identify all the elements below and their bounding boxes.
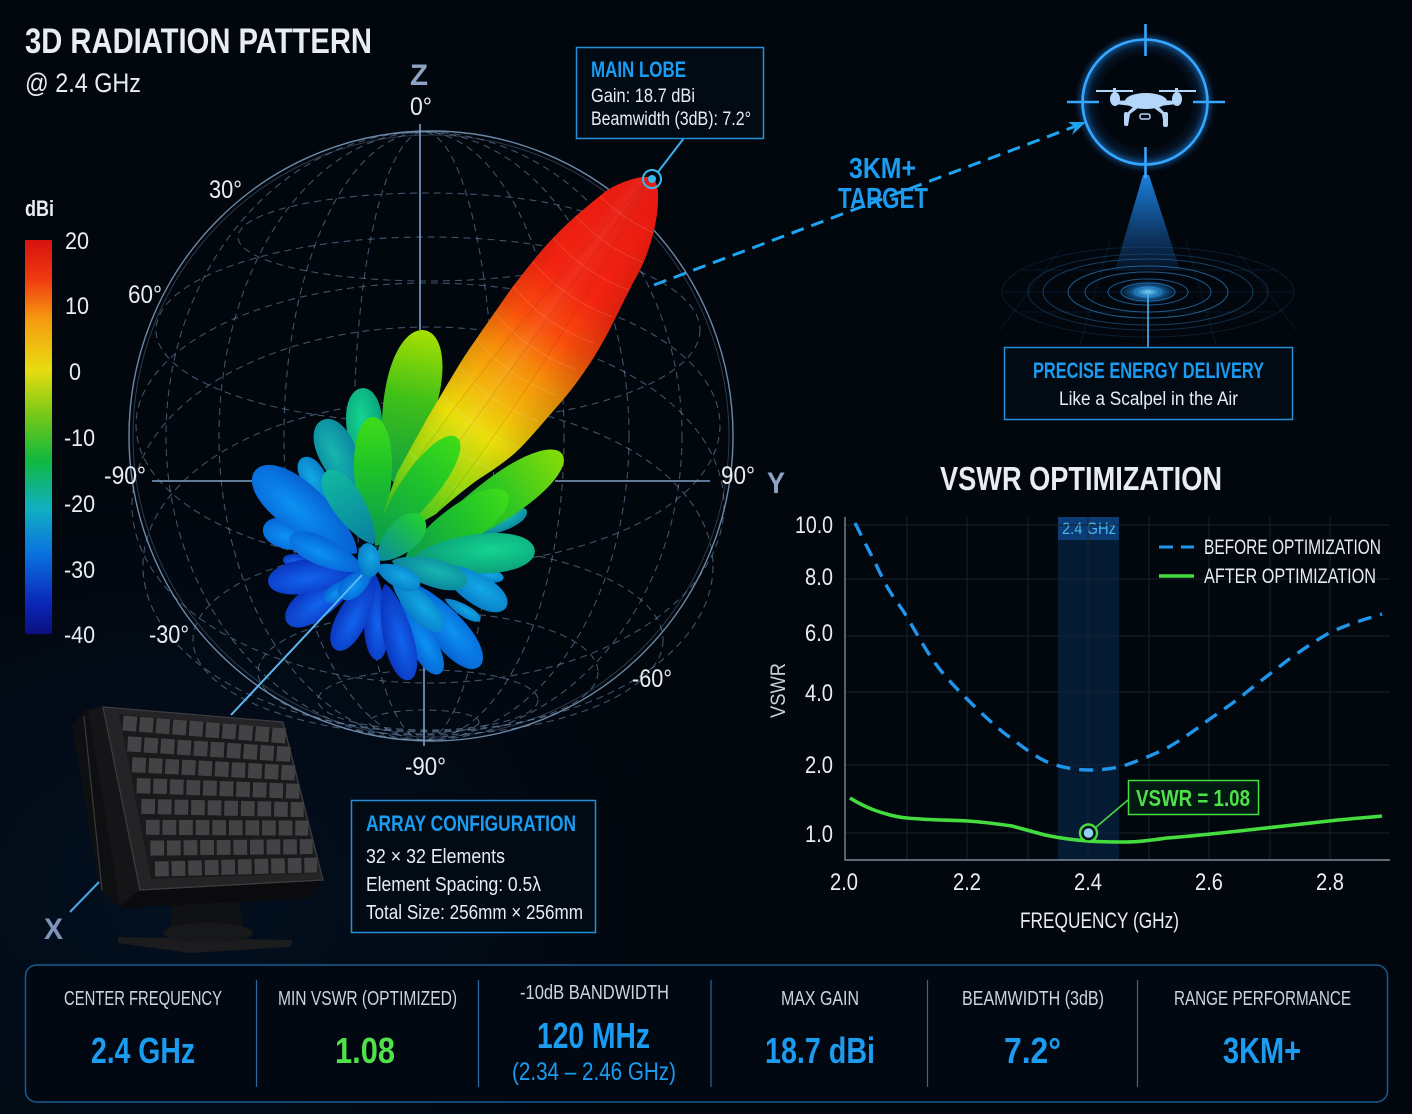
x axis ticks: 2.0 [830, 869, 858, 896]
chart title: VSWR OPTIMIZATION [940, 460, 1222, 497]
metric: beamwidth [962, 988, 1104, 1071]
energy beam and ground rings [1000, 175, 1296, 347]
VSWR line chart [767, 512, 1390, 933]
y axis ticks: 4.0 [805, 680, 833, 707]
callout: main lobe: Beamwidth (3dB): 7.2° [591, 109, 751, 130]
axis angle labels [104, 59, 785, 781]
icon: drone [1096, 88, 1196, 127]
x axis label [44, 882, 99, 946]
array boresight line [231, 575, 362, 715]
x axis label: X [44, 913, 63, 946]
metric: beamwidth: BEAMWIDTH (3dB) [962, 988, 1104, 1010]
callout: main lobe: Gain: 18.7 dBi [591, 86, 695, 107]
metric: range [1174, 988, 1351, 1071]
metric: bandwidth: (2.34 – 2.46 GHz) [512, 1058, 676, 1086]
axis angle labels: 30° [209, 176, 242, 204]
y axis ticks: 1.0 [805, 821, 833, 848]
metric: center frequency: 2.4 GHz [91, 1030, 195, 1071]
axis angle labels: Z [410, 59, 428, 92]
metric: min vswr [278, 988, 457, 1071]
metric: max gain: 18.7 dBi [765, 1030, 875, 1071]
marker: optimal point [1080, 800, 1128, 842]
axis titles: FREQUENCY (GHz) [1020, 908, 1179, 933]
icon: target reticle [1067, 24, 1225, 178]
y axis ticks: 8.0 [805, 564, 833, 591]
axis angle labels: 60° [128, 281, 162, 309]
label: 3km target: 3KM+ [849, 153, 916, 185]
callout: VSWR value: VSWR = 1.08 [1136, 785, 1250, 811]
callout: precise energy delivery: PRECISE ENERGY DELIVERY [1033, 358, 1264, 383]
colour scale legend: 10 [65, 293, 89, 320]
title: 3D RADIATION PATTERN [25, 22, 372, 61]
callout: array configuration [352, 800, 596, 932]
metric: bandwidth: 120 MHz [537, 1015, 650, 1056]
callout: VSWR value [1128, 780, 1258, 814]
axis angle labels: -30° [149, 621, 189, 649]
main lobe [382, 176, 658, 520]
chart legend [1159, 536, 1381, 588]
colour scale legend: 0 [69, 359, 81, 386]
metric: range: 3KM+ [1223, 1030, 1301, 1071]
axis angle labels: -60° [632, 665, 672, 693]
label: 3km target [838, 153, 928, 215]
arrow: beam to target [654, 122, 1086, 285]
colour scale legend: -10 [64, 425, 95, 452]
y axis ticks: 6.0 [805, 620, 833, 647]
metric: beamwidth: 7.2° [1004, 1030, 1061, 1071]
colour scale legend: dBi [25, 196, 54, 221]
panel: key metrics [26, 965, 1388, 1102]
axis titles: VSWR [767, 663, 790, 718]
axis angle labels: 0° [410, 93, 432, 121]
metric: center frequency: CENTER FREQUENCY [64, 988, 222, 1010]
title [25, 22, 372, 98]
colour scale legend [25, 196, 95, 649]
axis angle labels: -90° [104, 462, 146, 490]
metric: min vswr: MIN VSWR (OPTIMIZED) [278, 988, 457, 1010]
main lobe marker [643, 138, 684, 188]
y axis ticks: 10.0 [795, 512, 833, 539]
side lobes in front of main lobe [266, 427, 575, 684]
colour scale legend: -40 [64, 622, 95, 649]
metric: max gain [765, 988, 875, 1071]
x axis ticks [830, 869, 1344, 896]
colour scale legend: -30 [64, 557, 95, 584]
axis angle labels: -90° [405, 753, 446, 781]
metric: min vswr: 1.08 [335, 1030, 395, 1071]
before optimization curve [855, 523, 1382, 770]
callout: precise energy delivery: Like a Scalpel in the Air [1059, 389, 1239, 410]
metric: center frequency [64, 988, 222, 1071]
callout: precise energy delivery [1004, 348, 1292, 420]
x axis ticks: 2.4 [1074, 869, 1102, 896]
callout: array configuration: ARRAY CONFIGURATION [366, 811, 576, 836]
colour scale legend: -20 [64, 491, 95, 518]
axis titles [767, 663, 1179, 933]
title: @ 2.4 GHz [25, 68, 141, 98]
axis angle labels: 90° [721, 462, 755, 490]
side lobes behind main lobe [240, 325, 530, 625]
colour scale legend: 20 [65, 228, 89, 255]
label: 3km target: TARGET [838, 183, 928, 215]
highlighted 2.4 GHz band: 2.4 GHz [1062, 519, 1116, 538]
callout: array configuration: 32 × 32 Elements [366, 846, 505, 868]
after optimization curve [850, 798, 1382, 842]
callout: array configuration: Total Size: 256mm × 256mm [366, 902, 583, 924]
y axis ticks [795, 512, 833, 848]
callout: array configuration: Element Spacing: 0.5λ [366, 874, 541, 896]
callout: main lobe [576, 48, 764, 138]
icon: antenna array hardware [72, 707, 323, 953]
sphere grid [129, 124, 733, 746]
radiation pattern lobes [252, 176, 658, 680]
x axis ticks: 2.8 [1316, 869, 1344, 896]
metric: max gain: MAX GAIN [781, 988, 859, 1010]
y axis ticks: 2.0 [805, 752, 833, 779]
x axis ticks: 2.6 [1195, 869, 1223, 896]
metric: bandwidth: -10dB BANDWIDTH [520, 982, 669, 1004]
x axis ticks: 2.2 [953, 869, 981, 896]
metric: range: RANGE PERFORMANCE [1174, 988, 1351, 1010]
callout: main lobe: MAIN LOBE [591, 57, 686, 82]
axis angle labels: Y [767, 467, 785, 500]
metric: bandwidth [512, 982, 676, 1086]
highlighted 2.4 GHz band [1058, 517, 1119, 860]
